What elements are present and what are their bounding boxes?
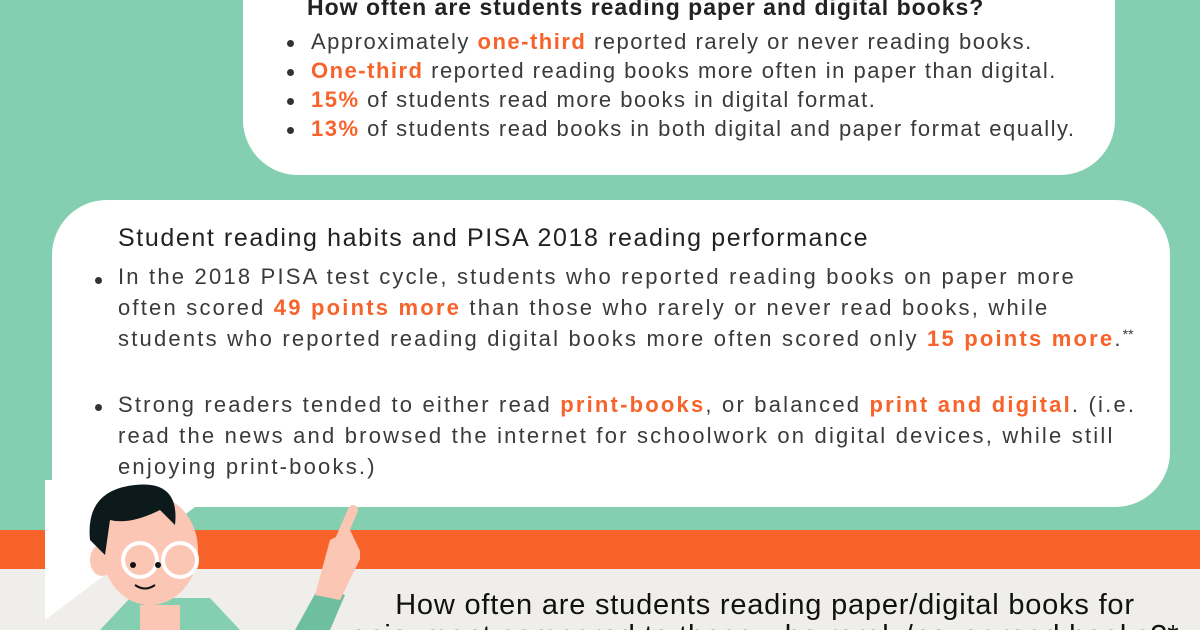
bullet list: reading frequency: One-third reported reading books more often in paper than digital. (311, 58, 1057, 83)
bullet: strong readers: enjoying print-books.) (118, 454, 377, 479)
bullet: strong readers: read the news and browsed the internet for schoolwork on digital devices, while still (118, 423, 1115, 448)
bullet: strong readers (95, 392, 1136, 479)
icon: character pointing (90, 484, 360, 630)
orange band (0, 530, 1200, 570)
bullet list: reading frequency: Approximately one-third reported rarely or never reading books. (311, 29, 1033, 54)
bullet: score difference: students who reported reading digital books more often scored only 15 points more.** (118, 326, 1134, 351)
bullet: score difference (95, 264, 1134, 351)
bullet: score difference: In the 2018 PISA test cycle, students who reported reading books on paper more (118, 264, 1076, 289)
bullet list: reading frequency: 15% of students read more books in digital format. (311, 87, 876, 112)
heading: PISA: Student reading habits and PISA 2018 reading performance (118, 224, 869, 252)
panel: reading habits and PISA performance (52, 200, 1170, 507)
heading: bottom question (350, 590, 1180, 630)
bullet: strong readers: Strong readers tended to either read print-books, or balanced print and digital. (i.e. (118, 392, 1136, 417)
bullet list: reading frequency: 13% of students read books in both digital and paper format equally. (311, 116, 1075, 141)
bottom grey area (0, 569, 1200, 630)
bullet list: reading frequency (287, 29, 1075, 141)
panel: top bubble (243, 0, 1115, 175)
bullet: score difference: often scored 49 points more than those who rarely or never read books, while (118, 295, 1050, 320)
